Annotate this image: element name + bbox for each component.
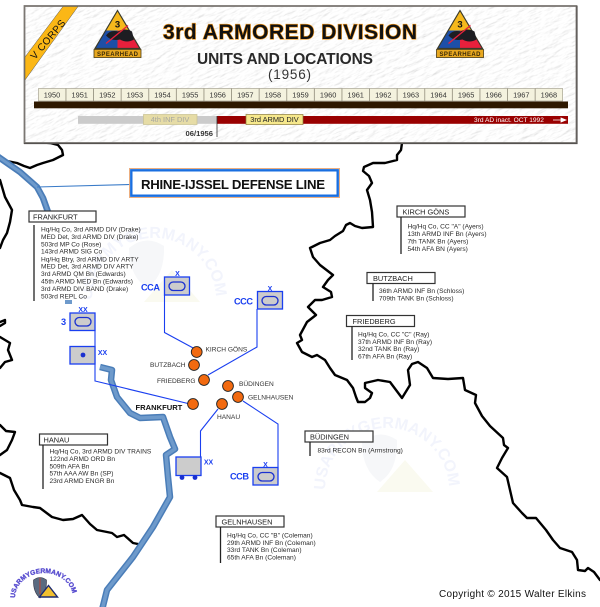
unit list: Hanau: 122nd ARMD ORD Bn [50, 456, 115, 463]
unit symbol: 3rd division [61, 307, 95, 330]
header panel [24, 5, 578, 144]
unit list: Friedberg: Hq/Hq Co, CC "C" (Ray) [358, 332, 429, 338]
unit list: Kirch Göns: 54th AFA BN (Ayers) [408, 246, 468, 253]
timeline year cells: 1952 [99, 90, 116, 100]
year: (1956) [268, 67, 311, 82]
unit symbol: trains: XX [204, 460, 213, 466]
unit symbol: CCA [141, 271, 190, 295]
international border: west fragments [0, 320, 12, 368]
international border: east [297, 143, 600, 580]
panel background [26, 7, 576, 142]
watermark: lower arc: USARMYGERMANY.COM [314, 417, 460, 489]
unit list: Friedberg: 37th ARMD INF Bn (Ray) [358, 339, 432, 346]
location labels: GELNHAUSEN [248, 394, 294, 402]
callout: Rhine-IJssel defense line [130, 168, 340, 198]
ribbon: V CORPS [25, 6, 78, 80]
unit symbol: CCA: X [175, 271, 180, 278]
unit list: Butzbach: 709th TANK Bn (Schloss) [379, 295, 454, 302]
timeline year cells: 1963 [403, 90, 419, 100]
unit list: Kirch Göns: Hq/Hq Co, CC "A" (Ayers) [408, 224, 484, 230]
unit list: Hanau: 57th AAA AW Bn (SP) [50, 471, 113, 478]
copyright: Copyright © 2015 Walter Elkins [439, 589, 586, 600]
timeline year cells [38, 88, 563, 101]
date tick: 06/1956 [186, 129, 213, 138]
unit list: Hanau: 509th AFA Bn [50, 463, 90, 470]
unit list: Kirch Göns: KIRCH GÖNS [402, 208, 449, 216]
unit list: Butzbach: 36th ARMD INF Bn (Schloss) [379, 288, 464, 295]
timeline year cells: 1960 [320, 90, 336, 100]
unit list: Kirch Göns: 13th ARMD INF Bn (Ayers) [408, 231, 487, 238]
timeline axis bar [34, 102, 568, 108]
unit list: Gelnhausen: 65th AFA Bn (Coleman) [227, 554, 296, 562]
watermark: upper arc: USARMYGERMANY.COM [81, 227, 227, 299]
logo: USARMYGERMANY.COM: USARMYGERMANY.COM [10, 568, 78, 598]
unit list: Friedberg [346, 316, 432, 360]
unit symbol: CCB: CCB [230, 472, 249, 482]
international border: west upper [0, 180, 12, 248]
unit list: Frankfurt: 143rd ARMD SIG Co [41, 248, 103, 256]
unit list: Hanau: HANAU [44, 435, 69, 444]
unit list: Hanau [40, 434, 152, 489]
unit symbol: CCB: X [263, 462, 268, 469]
unit list: Frankfurt: 503rd MP Co (Rose) [41, 241, 101, 248]
international border: southwest [0, 425, 143, 545]
watermark: faded insignia upper [129, 240, 200, 302]
unit list: Frankfurt: FRANKFURT [33, 212, 78, 221]
timeline year cells: 1950 [44, 90, 60, 100]
location labels: HANAU [217, 414, 240, 421]
unit list: Gelnhausen: Hq/Hq Co, CC "B" (Coleman) [227, 532, 313, 540]
unit list: Gelnhausen: 29th ARMD INF Bn (Coleman) [227, 540, 316, 547]
unit list: Büdingen [305, 431, 403, 456]
bar: 4th INF DIV period [78, 114, 217, 124]
ribbon: V CORPS: V CORPS [29, 18, 68, 62]
unit list: Frankfurt: Hq/Hq Btry, 3rd ARMD DIV ARTY [41, 256, 139, 264]
icon: right division patch [436, 10, 484, 58]
unit symbol: 3rd division: XX [78, 307, 88, 314]
timeline year cells: 1964 [430, 90, 447, 100]
bar: 4th INF DIV period: 4th INF DIV [151, 115, 189, 124]
location labels: FRIEDBERG [157, 378, 195, 385]
unit symbol: CCB [230, 462, 278, 485]
unit list: Frankfurt [29, 211, 141, 301]
unit list: Butzbach [367, 272, 464, 302]
unit symbol: trains [176, 457, 213, 480]
unit list: Kirch Göns [397, 206, 487, 254]
timeline year cells: 1951 [71, 90, 88, 100]
title: 3rd ARMORED DIVISION [163, 21, 417, 44]
unit list: Hanau: Hq/Hq Co, 3rd ARMD DIV TRAINS [50, 448, 152, 456]
unit list: Frankfurt: 3rd ARMD QM Bn (Edwards) [41, 271, 126, 278]
timeline year cells: 1953 [127, 90, 143, 100]
timeline year cells: 1957 [237, 90, 254, 100]
unit symbol: CCC: X [268, 286, 273, 293]
unit list: Kirch Göns: 7th TANK Bn (Ayers) [408, 238, 468, 245]
location labels: BUTZBACH [150, 362, 186, 369]
unit symbol: CCA: CCA [141, 282, 160, 292]
unit symbol: artillery: XX [98, 350, 107, 357]
leader line to defense line label [37, 184, 130, 187]
watermark: faded insignia lower [362, 434, 433, 492]
date tick [186, 116, 217, 138]
timeline year cells: 1956 [209, 90, 226, 100]
timeline year cells: 1955 [182, 90, 198, 100]
unit list: Büdingen: BÜDINGEN [310, 432, 349, 441]
timeline year cells: 1959 [292, 90, 309, 100]
location markers [188, 347, 243, 409]
unit list: Frankfurt: 45th ARMD MED Bn (Edwards) [41, 278, 133, 286]
connector lines [95, 295, 278, 467]
timeline year cells: 1968 [541, 90, 557, 100]
river Rhine upper reach [0, 156, 48, 212]
unit list: Gelnhausen: GELNHAUSEN [222, 518, 272, 526]
bar: 3rd ARMD DIV period: 3rd AD inact. OCT 1992 [474, 117, 544, 124]
location labels: FRANKFURT [136, 403, 183, 412]
unit list: Friedberg: 32nd TANK Bn (Ray) [358, 346, 419, 353]
location labels: KIRCH GÖNS [206, 346, 248, 354]
bar: 3rd ARMD DIV period [217, 114, 568, 124]
unit list: Frankfurt: MED Det, 3rd ARMD DIV (Drake) [41, 234, 138, 241]
panel frame [24, 6, 576, 143]
unit symbol: 3rd division: 3 [61, 317, 66, 327]
timeline year cells: 1961 [347, 90, 364, 100]
icon: left division patch [94, 10, 141, 58]
bar: 3rd ARMD DIV period: 3rd ARMD DIV [250, 115, 299, 124]
unit list: Frankfurt: MED Det, 3rd ARMD DIV ARTY [41, 264, 134, 271]
unit list: Friedberg: 67th AFA Bn (Ray) [358, 354, 412, 360]
timeline year cells: 1954 [154, 90, 171, 100]
unit symbol: CCC: CCC [234, 296, 253, 306]
unit list: Gelnhausen [216, 516, 316, 563]
callout: Rhine-IJssel defense line: RHINE-IJSSEL DEFENSE LINE [141, 177, 325, 192]
unit symbol: artillery [70, 346, 107, 364]
location labels: BÜDINGEN [239, 380, 274, 388]
location labels [136, 346, 294, 421]
unit list: Frankfurt: 503rd REPL Co [41, 293, 87, 300]
timeline year cells: 1958 [265, 90, 281, 100]
timeline year cells: 1965 [458, 90, 474, 100]
subtitle: UNITS AND LOCATIONS [197, 51, 373, 68]
unit list: Friedberg: FRIEDBERG [352, 317, 396, 326]
timeline year cells: 1966 [485, 90, 502, 100]
unit list: Gelnhausen: 33rd TANK Bn (Coleman) [227, 547, 302, 554]
unit list: Frankfurt: 3rd ARMD DIV BAND (Drake) [41, 286, 128, 293]
river fragment [65, 300, 72, 304]
international border: north [0, 142, 63, 168]
unit list: Butzbach: BUTZBACH [373, 274, 413, 283]
panel shadow edge [24, 6, 577, 144]
unit list: Büdingen: 83rd RECON Bn (Armstrong) [318, 447, 403, 454]
unit list: Hanau: 23rd ARMD ENGR Bn [50, 478, 115, 485]
timeline year cells: 1962 [375, 90, 392, 100]
unit list: Frankfurt: Hq/Hq Co, 3rd ARMD DIV (Drake) [41, 226, 141, 234]
timeline year cells: 1967 [513, 90, 530, 100]
unit symbol: CCC [234, 286, 282, 309]
river Rhine main reach [100, 367, 175, 607]
